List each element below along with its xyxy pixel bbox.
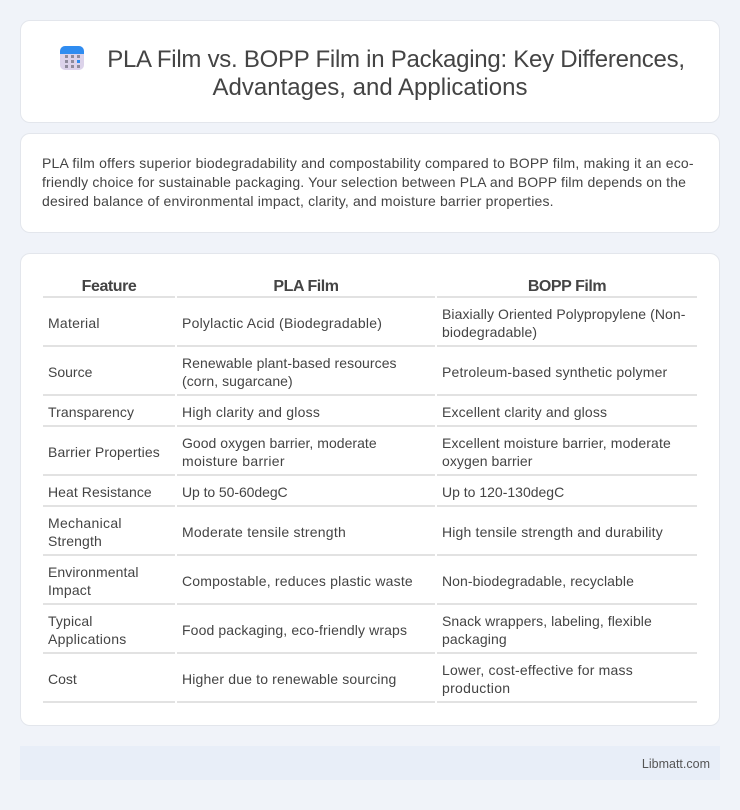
table: Higher due to renewable sourcing (182, 671, 396, 687)
table: Good oxygen barrier, moderate (182, 435, 377, 451)
table: Renewable plant-based resources (182, 355, 397, 371)
title (107, 46, 685, 101)
row: barrier properties: Barrier Properties (48, 444, 160, 460)
row: typical applications: Typical (48, 613, 93, 629)
intro text (42, 155, 694, 209)
row: source: Source (48, 364, 92, 380)
row: mechanical strength (48, 515, 122, 549)
row: environmental impact: Environmental (48, 564, 139, 580)
column heading: BOPP film: BOPP Film (528, 278, 606, 295)
table: Petroleum-based synthetic polymer (442, 364, 667, 380)
row: environmental impact: Impact (48, 582, 91, 598)
title: Advantages, and Applications (213, 74, 527, 101)
intro text: desired balance of environmental impact, clarity, and moisture barrier properties. (42, 193, 554, 209)
table: moisture barrier (182, 453, 285, 469)
column heading: PLA film: PLA Film (273, 278, 339, 295)
row: heat resistance: Heat Resistance (48, 484, 152, 500)
row: material: Material (48, 315, 100, 331)
intro text: friendly choice for sustainable packaging. Your selection between PLA and BOPP film depends on the (42, 174, 686, 190)
row: transparency: Transparency (48, 404, 134, 420)
table: Compostable, reduces plastic waste (182, 573, 413, 589)
table: packaging (442, 631, 507, 647)
table: biodegradable) (442, 324, 537, 340)
column heading: feature: Feature (82, 278, 136, 295)
table: production (442, 680, 510, 696)
comparison table panel (20, 253, 720, 726)
row: cost: Cost (48, 671, 77, 687)
table: Moderate tensile strength (182, 524, 346, 540)
row: mechanical strength: Mechanical (48, 515, 122, 531)
table: Polylactic Acid (Biodegradable) (182, 315, 382, 331)
header panel (20, 20, 720, 123)
table: oxygen barrier (442, 453, 532, 469)
table: (corn, sugarcane) (182, 373, 293, 389)
intro text: PLA film offers superior biodegradability and compostability compared to BOPP film, making it an eco- (42, 155, 694, 171)
table: Excellent clarity and gloss (442, 404, 607, 420)
row: typical applications (48, 613, 126, 647)
table: High clarity and gloss (182, 404, 320, 420)
table: Up to 120-130degC (442, 484, 564, 500)
title: PLA Film vs. BOPP Film in Packaging: Key Differences, (107, 46, 685, 73)
row: typical applications: Applications (48, 631, 126, 647)
table: High tensile strength and durability (442, 524, 663, 540)
intro panel (20, 133, 720, 233)
table: Non-biodegradable, recyclable (442, 573, 634, 589)
row: mechanical strength: Strength (48, 533, 102, 549)
row: environmental impact (48, 564, 139, 598)
table: Snack wrappers, labeling, flexible (442, 613, 652, 629)
footer credit: Libmatt.com (642, 757, 710, 771)
table: Food packaging, eco-friendly wraps (182, 622, 407, 638)
table: Excellent moisture barrier, moderate (442, 435, 671, 451)
footer bar (20, 746, 720, 780)
table: Up to 50-60degC (182, 484, 288, 500)
icon: calendar grid (60, 46, 84, 70)
table: Biaxially Oriented Polypropylene (Non- (442, 306, 686, 322)
table: Lower, cost-effective for mass (442, 662, 633, 678)
